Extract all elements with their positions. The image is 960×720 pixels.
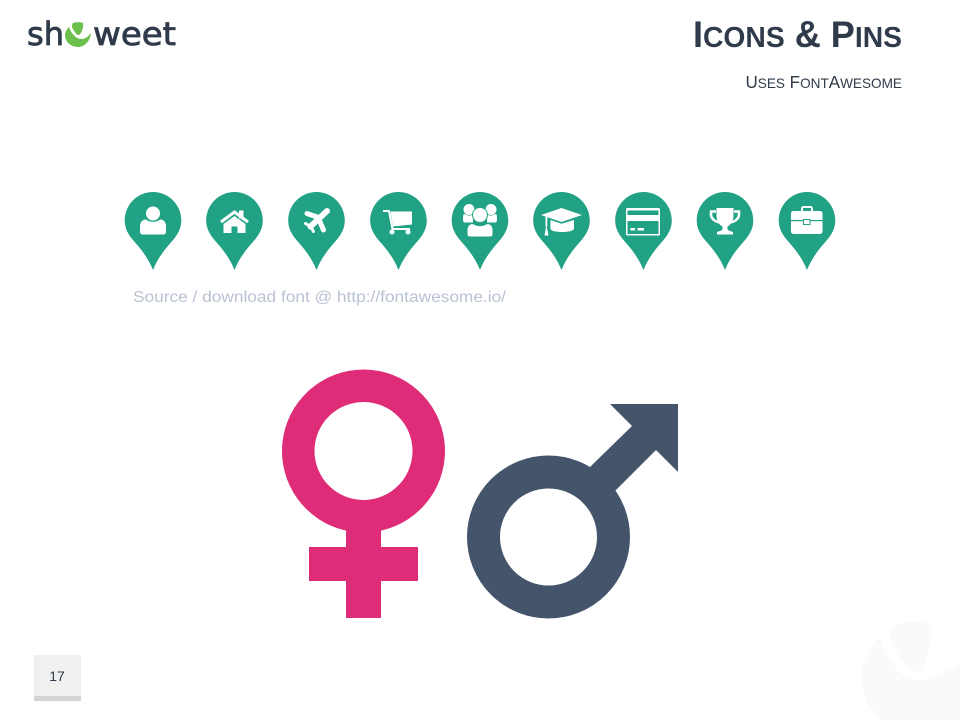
pin: trophy <box>697 192 753 270</box>
source note: Source / download font @ http://fontawesome.io/ <box>133 289 507 306</box>
icon: logo mark <box>65 22 91 47</box>
icon: male symbol <box>484 404 678 602</box>
page number: 17 <box>49 668 65 684</box>
pin: home <box>206 192 263 270</box>
logo: sh <box>27 15 64 53</box>
title: ICONS & PINS <box>693 14 902 55</box>
pin: user <box>125 192 181 270</box>
pin: group <box>452 192 508 270</box>
pin: cart <box>370 192 427 270</box>
page number <box>34 655 81 701</box>
icon: female symbol <box>282 370 445 618</box>
pin: graduation cap <box>533 192 590 270</box>
pin: briefcase <box>779 192 835 270</box>
logo: weet <box>93 15 176 53</box>
pin: plane <box>288 192 345 270</box>
logo <box>27 15 176 53</box>
watermark logo <box>862 622 960 720</box>
pin: credit card <box>615 192 672 270</box>
subtitle: USES FONTAWESOME <box>746 72 902 92</box>
